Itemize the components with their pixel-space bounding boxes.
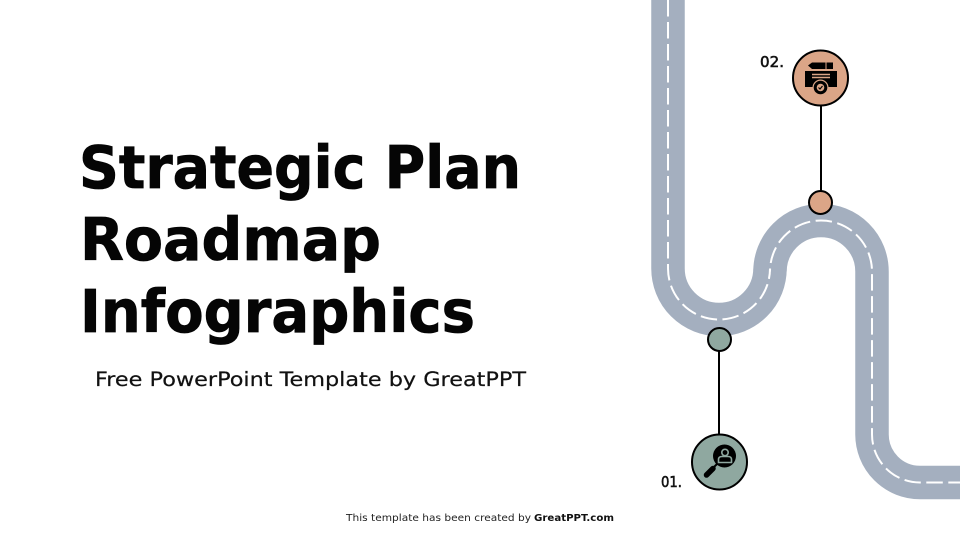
footer credit: GreatPPT.com (534, 513, 614, 524)
subtitle: Free PowerPoint Template by GreatPPT (95, 368, 526, 391)
milestone 01: connector, dot and icon badge (692, 328, 747, 490)
connector line 02 (820, 105, 822, 192)
title: Strategic Plan (79, 133, 521, 202)
icon badge 02: document with check seal (793, 50, 848, 106)
connector line 01 (718, 350, 720, 436)
footer credit: This template has been created by (345, 513, 531, 524)
icon badge 01: magnifier with person (692, 434, 747, 490)
road marker dot 01 (708, 328, 731, 351)
label 02.: 02. (760, 53, 784, 71)
footer credit (345, 513, 614, 524)
road marker dot 02 (809, 191, 832, 214)
title: Roadmap (80, 205, 381, 274)
milestone 02: connector, dot and icon badge (793, 50, 848, 214)
title: Infographics (80, 277, 475, 346)
label 01.: 01. (661, 473, 682, 491)
road (668, 0, 960, 483)
title (79, 133, 521, 346)
